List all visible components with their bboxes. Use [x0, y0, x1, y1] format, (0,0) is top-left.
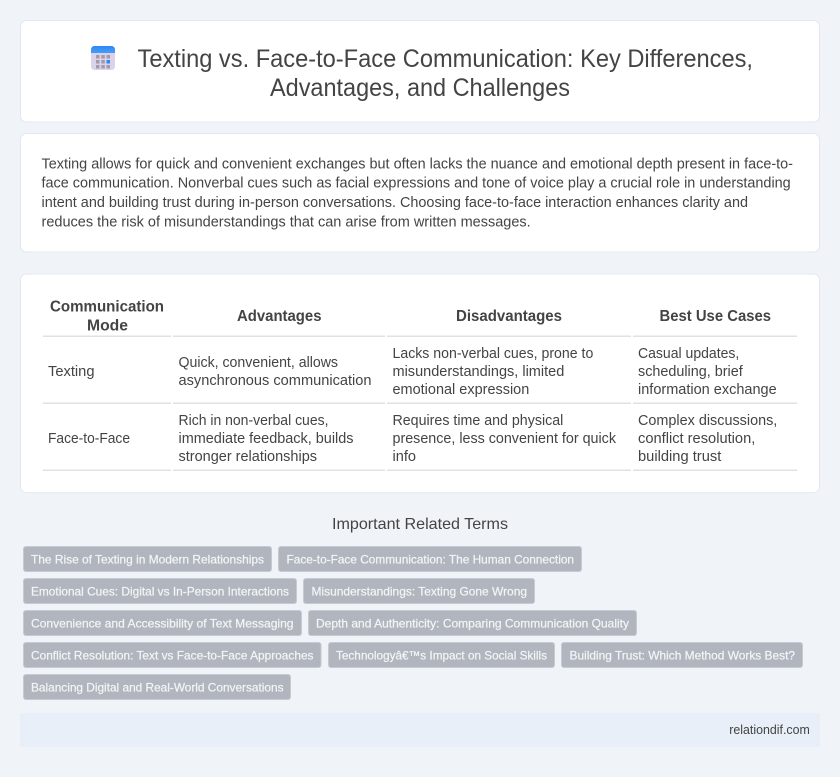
table row: texting: Casual updates,: [638, 346, 739, 362]
panel: introduction: [20, 134, 820, 252]
table row: texting: scheduling, brief: [638, 364, 744, 380]
intro text block: intent and building trust during in-person conversations. Choosing face-to-face interaction enhances clarity and: [42, 195, 748, 211]
table row: face-to-face: conflict resolution,: [638, 431, 755, 447]
table row: texting: information exchange: [638, 382, 777, 398]
table row: face-to-face: presence, less convenient for quick: [392, 431, 617, 447]
table row: face-to-face: stronger relationships: [178, 449, 317, 465]
tag: [24, 610, 302, 636]
table header row: Disadvantages: [456, 308, 562, 325]
intro text block: reduces the risk of misunderstandings that can arise from written messages.: [42, 214, 531, 230]
table header row: Best Use Cases: [660, 308, 771, 325]
table row: face-to-face: Complex discussions,: [638, 413, 777, 429]
table header row: Communication: [50, 299, 164, 316]
table row: texting: Lacks non-verbal cues, prone to: [392, 346, 593, 362]
title: Advantages, and Challenges: [270, 74, 570, 102]
tag: [24, 674, 290, 700]
table row: face-to-face: info: [392, 449, 416, 465]
intro text block: [42, 156, 793, 230]
tag: The Rise of Texting in Modern Relationships: [31, 552, 264, 566]
tag: [304, 578, 534, 604]
title: [138, 45, 753, 102]
table row: face-to-face: Rich in non-verbal cues,: [178, 413, 328, 429]
intro text block: face communication. Nonverbal cues such as facial expressions and tone of voice play a crucial role in understanding: [42, 176, 791, 192]
tag: Emotional Cues: Digital vs In-Person Interactions: [31, 584, 289, 598]
header panel: [20, 20, 820, 122]
tag: [328, 642, 554, 668]
table row: texting: Texting: [48, 364, 94, 380]
table row: face-to-face: immediate feedback, builds: [178, 431, 354, 447]
tag: Technologyâ€™s Impact on Social Skills: [336, 648, 547, 662]
intro text block: Texting allows for quick and convenient exchanges but often lacks the nuance and emotional depth present in face-to-: [42, 156, 793, 172]
footer: relationdif.com: [729, 722, 810, 737]
table row: texting: Quick, convenient, allows: [178, 355, 338, 371]
table header row: [50, 299, 771, 335]
table header row: Mode: [87, 318, 128, 335]
tag: Face-to-Face Communication: The Human Connection: [286, 552, 574, 566]
table row: face-to-face: building trust: [638, 449, 721, 465]
tag: [278, 546, 582, 572]
panel: comparison table: [20, 274, 820, 493]
title: Texting vs. Face-to-Face Communication: Key Differences,: [138, 45, 753, 73]
footer: [20, 713, 820, 747]
icon: calendar: [91, 46, 115, 70]
tag: Misunderstandings: Texting Gone Wrong: [312, 584, 527, 598]
tag: [24, 578, 296, 604]
table row: face-to-face: [48, 413, 777, 465]
table row: face-to-face: Requires time and physical: [392, 413, 563, 429]
table row: texting: asynchronous communication: [178, 373, 372, 389]
tag: [24, 642, 321, 668]
table row: texting: [48, 346, 777, 398]
table header row: Advantages: [237, 308, 322, 325]
table row: texting: emotional expression: [392, 382, 529, 398]
table row: face-to-face: Face-to-Face: [48, 431, 130, 447]
tag: Building Trust: Which Method Works Best?: [570, 648, 795, 662]
tag: [308, 610, 636, 636]
tag: Balancing Digital and Real-World Conversations: [31, 680, 284, 694]
heading: important related terms: Important Related Terms: [332, 516, 508, 533]
table row: texting: misunderstandings, limited: [392, 364, 564, 380]
tag: [562, 642, 802, 668]
related terms tags: [24, 546, 802, 700]
tag: Conflict Resolution: Text vs Face-to-Face Approaches: [31, 648, 314, 662]
tag: [24, 546, 272, 572]
tag: Depth and Authenticity: Comparing Communication Quality: [316, 616, 629, 630]
tag: Convenience and Accessibility of Text Messaging: [31, 616, 294, 630]
